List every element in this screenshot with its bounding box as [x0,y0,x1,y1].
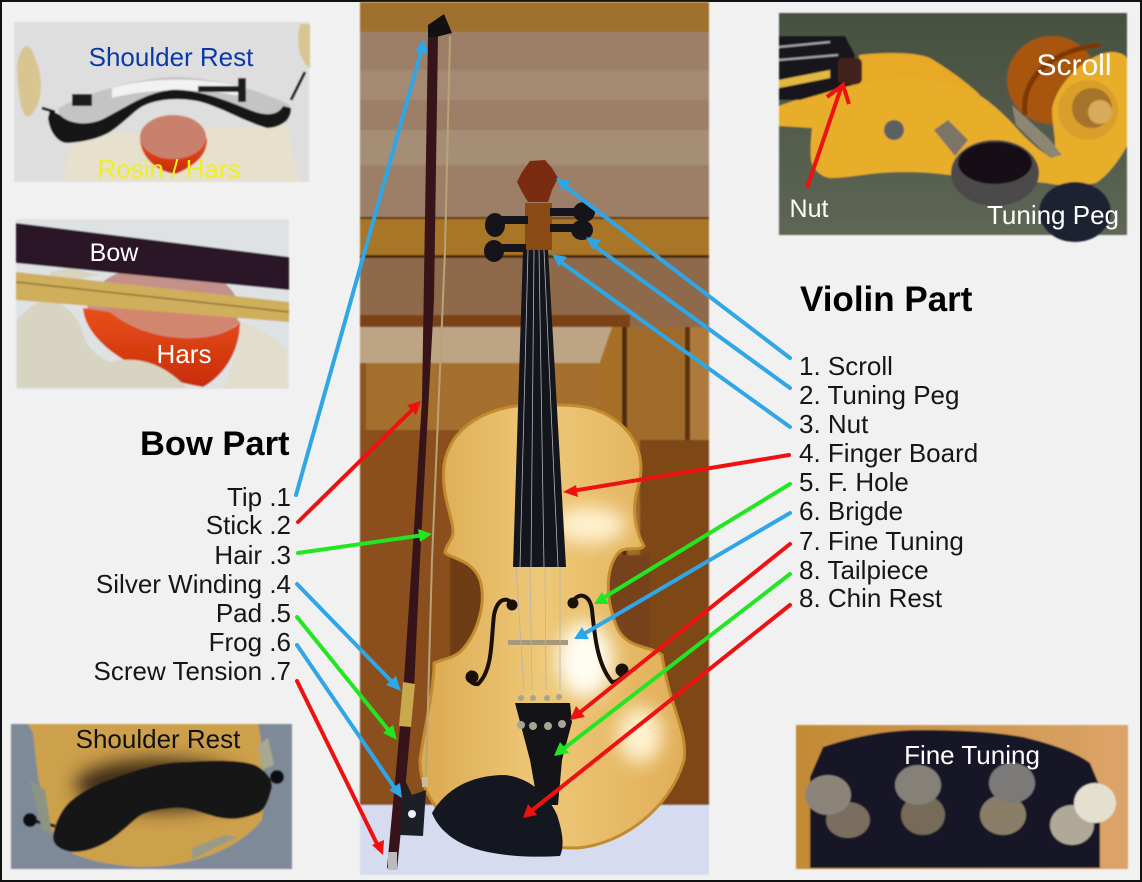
inset photo: shoulder rest and rosin [14,22,310,184]
inset photo: shoulder rest on violin [11,724,292,869]
list: bow parts: Pad .5 [216,598,291,628]
list: violin parts: 5. F. Hole [799,467,909,497]
violin body [420,405,685,848]
label: Nut [790,195,829,223]
tailpiece [515,703,572,805]
label: Rosin / Hars [97,154,241,184]
list: bow parts: Tip .1 [227,482,291,512]
label: Hars [157,339,211,369]
arrows: violin parts [523,178,790,818]
photo: violin and bow on wooden door [360,2,709,878]
heading: violin part: Violin Part [800,280,973,319]
frog [400,778,426,836]
scroll [517,160,558,202]
list: violin parts: 8. Tailpiece [799,555,929,585]
f holes [466,596,628,684]
label: Shoulder Rest [89,42,254,72]
list: violin parts: 4. Finger Board [799,438,978,468]
bow tip [428,14,452,37]
label: Tuning Peg [987,200,1119,230]
list: bow parts: Frog .6 [209,627,291,657]
list: bow parts [93,482,291,686]
label: Fine Tuning [904,740,1040,770]
peg box [525,203,552,250]
label: Scroll [1036,49,1112,82]
bow hair [426,36,450,777]
inset photo: fine tuning [796,725,1128,869]
list: violin parts: 7. Fine Tuning [799,526,964,556]
list: bow parts: Screw Tension .7 [93,656,291,686]
list: bow parts: Silver Winding .4 [96,569,291,599]
finger board [513,250,566,567]
chin rest [432,775,563,857]
list: bow parts: Hair .3 [214,540,291,570]
bridge [508,640,568,645]
list: violin parts: 6. Brigde [799,496,903,526]
heading: bow part: Bow Part [140,425,290,463]
list: violin parts: 8. Chin Rest [799,583,943,613]
list: violin parts: 2. Tuning Peg [799,380,959,410]
arrow: nut [807,85,849,188]
list: violin parts: 1. Scroll [799,351,893,381]
inset photo: scroll, nut and tuning peg [779,13,1127,242]
label: Shoulder Rest [76,724,241,754]
list: violin parts: 3. Nut [799,409,869,439]
arrows: bow parts [296,39,432,855]
inset photo: bow and rosin closeup [16,219,289,389]
label: Bow [90,239,139,267]
bow stick [387,36,438,870]
silver winding [399,682,415,727]
tuning pegs [484,202,595,262]
list: violin parts [799,351,978,613]
fine tuners [517,694,566,730]
strings [516,250,560,690]
list: bow parts: Stick .2 [206,510,291,540]
